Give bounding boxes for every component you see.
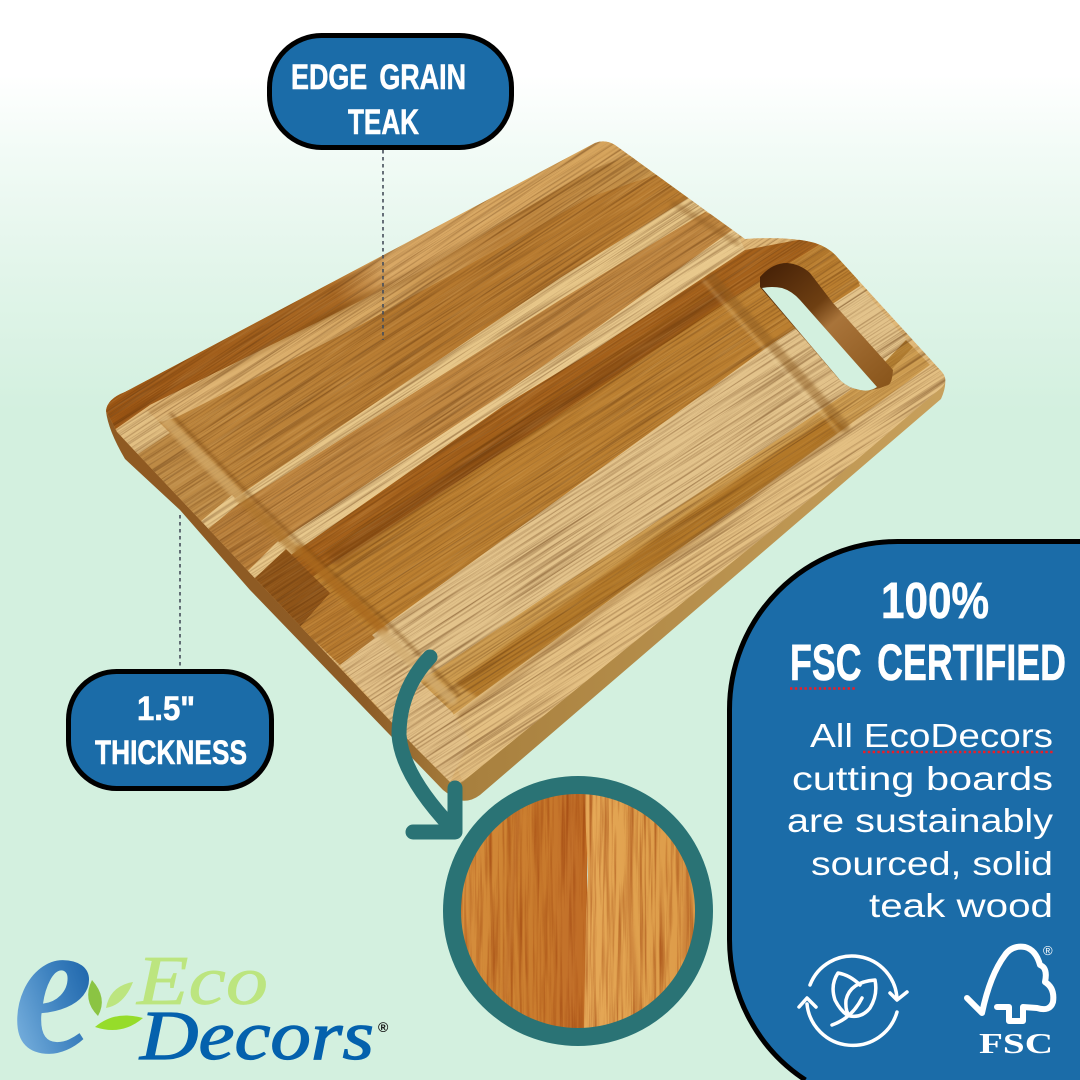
badge: thickness [68, 672, 272, 788]
icon: FSC tree logo: ® [1043, 943, 1053, 958]
board side edge [90, 380, 960, 820]
panel outline [730, 542, 1080, 1080]
handle stripe [885, 340, 913, 369]
dark streak in central strip [327, 288, 728, 567]
panel body text: All EcoDecors [810, 718, 1053, 755]
badge: thickness: THICKNESS [95, 734, 247, 772]
dotted leader: thickness [179, 515, 181, 666]
icon: FSC tree logo [967, 943, 1053, 1060]
dotted leader: edge grain [382, 150, 384, 340]
logo leaves [88, 980, 143, 1030]
badge: edge grain teak: TEAK [348, 103, 419, 142]
close-up wood grain circle [452, 785, 705, 1037]
icon: sustainable leaf cycle [799, 956, 907, 1045]
registered mark: ® [378, 1019, 389, 1035]
badge: edge grain teak [270, 36, 512, 148]
EcoDecors logo [13, 879, 389, 1080]
panel body text: sourced, solid [811, 846, 1053, 883]
panel body text: cutting boards [792, 761, 1053, 798]
badge: edge grain teak: EDGE GRAIN [291, 58, 466, 97]
logo word Eco: Eco [136, 943, 268, 1020]
panel heading [790, 572, 1066, 691]
icon: FSC tree logo: FSC [979, 1028, 1053, 1060]
dark wedge on top rim [275, 292, 368, 344]
left rim end-grain strips [117, 410, 470, 782]
panel body text [787, 718, 1053, 925]
juice groove [150, 165, 845, 715]
board top face strips [106, 141, 946, 783]
wood grain layers [106, 142, 946, 783]
cutting board photo illustration [106, 141, 946, 801]
panel body text: teak wood [869, 888, 1053, 925]
logo word Decors: Decors [139, 998, 374, 1075]
badge: thickness: 1.5" [137, 690, 195, 728]
panel body text: are sustainably [787, 803, 1053, 840]
curved arrow to close-up [399, 657, 455, 832]
panel: FSC certified [730, 542, 1080, 1080]
panel background [730, 542, 1080, 1080]
handle hole [762, 287, 877, 391]
handle slot inner wall [760, 263, 893, 390]
panel heading: 100% [881, 572, 989, 629]
